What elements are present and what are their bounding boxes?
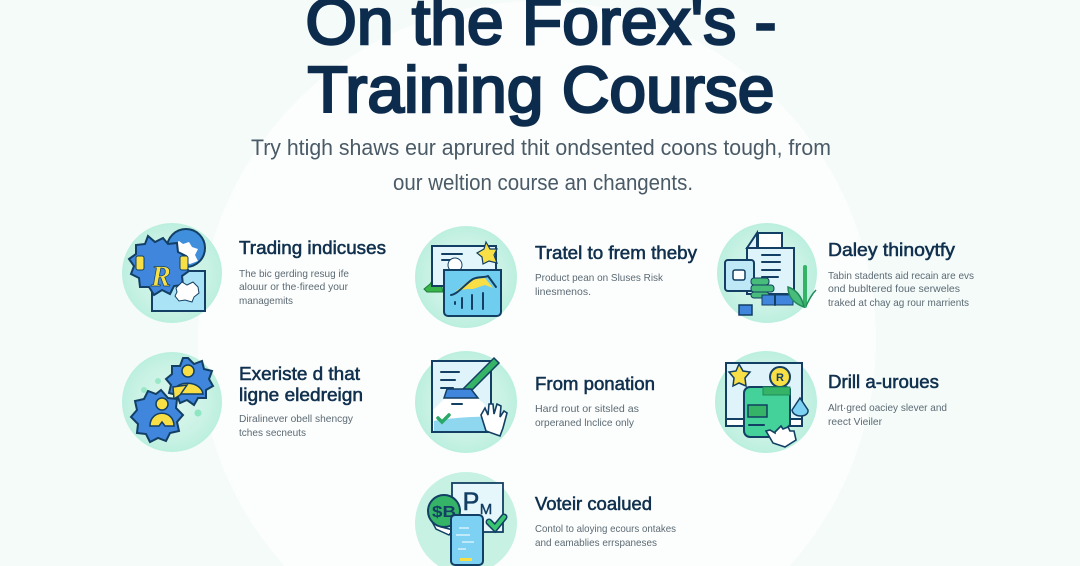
description line 2: tches secneuts [239,427,306,439]
panel: tratel to frem theby [415,226,697,328]
title: Training Course [308,53,774,126]
panel: exeriste d that [122,352,360,452]
icon: phone and coin [415,472,517,566]
heading: Voteir coalued [535,494,652,514]
panel: daley thinoytfy [717,223,955,323]
heading: From ponation [535,374,655,394]
icon: phone and coin: P [463,488,479,516]
icon: phone and coin: $B [432,504,456,521]
heading: Tratel to frem theby [535,243,697,263]
subtitle [251,135,831,195]
description line 2: orperaned lnclice only [535,417,635,429]
description: Diralinever obell shencgy [239,413,354,425]
description line 2: alouur or the·fireed your [239,281,348,293]
icon: chart report [415,226,517,328]
description: The bic gerding resug ife [239,268,349,280]
description: Hard rout or sitsled as [535,403,639,415]
heading: Drill a-uroues [828,372,939,392]
description: Product pean on Sluses Risk [535,272,664,284]
icon: monitor with card [715,351,817,453]
description line 3: managemits [239,295,293,307]
heading line 2: ligne eledreign [239,385,363,405]
panel: trading indicuses [122,223,386,323]
panel: drill a-uroues [715,351,939,453]
description line 2: linesmenos. [535,286,591,298]
description: Tabin stadents aid recain are evs [828,270,974,282]
icon: monitor with card: R [776,372,784,384]
description line 2: and eamablies errspaneses [535,537,657,549]
heading: Exeriste d that [239,364,360,384]
description line 2: ond bubltered foue serweles [828,283,960,295]
icon: documents and plant [717,223,817,323]
icon: R gear and globe: R [150,260,171,293]
heading: Daley thinoytfy [828,240,955,260]
heading: Trading indicuses [239,238,386,258]
subtitle: our weltion course an changents. [393,170,693,195]
description line 3: traked at chay ag rour marrients [828,297,969,309]
icon: phone and coin: M [480,501,492,518]
panel: from ponation [415,351,655,453]
title [306,0,776,126]
description: Contol to aloying ecours ontakes [535,523,676,535]
icon: people gears [122,352,222,452]
icon: R gear and globe [122,223,222,323]
description line 2: reect Vieiler [828,416,882,428]
subtitle: Try htigh shaws eur aprured thit ondsented coons tough, from [251,135,831,160]
description: Alrt·gred oaciey slever and [828,402,947,414]
icon: document and pen [415,351,517,453]
background white circle [198,1,876,566]
panel: voteir coalued [415,472,652,566]
